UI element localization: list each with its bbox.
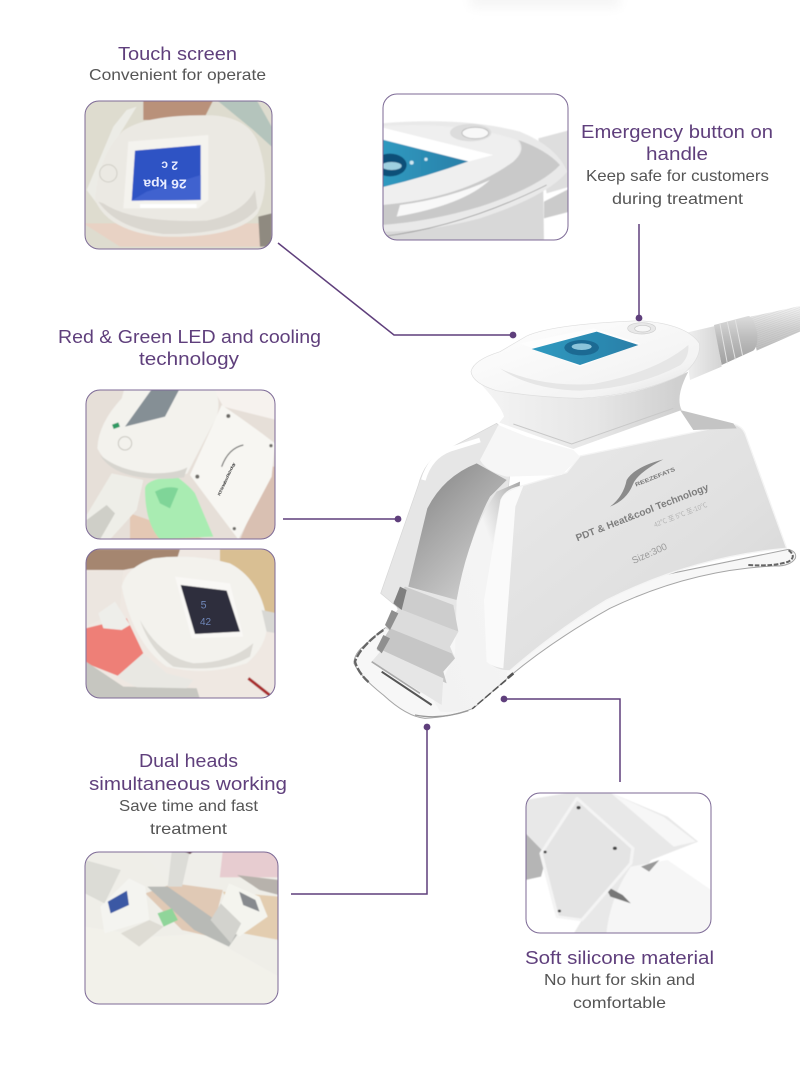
plate print: technology: PDT & Heat&cool Technology [574,482,711,544]
text block: emergency button: Emergency button on [581,122,773,142]
photo: dual heads [85,851,280,1006]
text block: dual heads: treatment [150,821,228,838]
photo frame: dual heads [85,852,278,1004]
connector: touch screen [278,243,516,338]
photo frame: emergency button [383,94,568,240]
device body shapes [354,306,800,718]
ribbed collar [714,316,757,365]
photo frame: green LED [86,390,275,539]
plate print: PDT & Heat&cool Technology [216,461,236,496]
screen readout [200,601,211,625]
text block: dual heads: simultaneous working [89,774,287,794]
text block: emergency button [581,122,773,208]
hose [751,306,800,351]
connector: silicone [501,696,620,782]
top rail [680,410,737,430]
text block: touch screen: Convenient for operate [89,67,266,84]
gel window [408,463,507,600]
text block: emergency button: Keep safe for customers [586,168,769,185]
white collar [683,326,722,380]
connector: LED [283,516,401,522]
stepped silicone ridges [393,587,458,632]
front plate [484,424,787,671]
photo: touch screen close-up [83,100,273,250]
handle top [471,321,700,398]
photo: emergency button close-up [384,121,568,240]
plate bevel highlight [484,486,523,668]
text block: touch screen [89,44,266,84]
text block: LED: Red & Green LED and cooling [58,327,321,347]
text block: touch screen: Touch screen [118,44,237,64]
emergency button [628,323,656,334]
connector: dual heads [291,724,430,894]
photo: green LED [86,387,277,540]
text block: dual heads: Save time and fast [119,798,259,815]
silicone lip [354,549,796,718]
rear plate [381,423,513,633]
text block: dual heads: Dual heads [139,751,238,771]
screen readout: 26 kpa [142,176,187,190]
plate print: size: Size:300 [630,542,669,567]
screen readout: 5 [201,599,207,611]
screen readout: 2 c [161,159,178,173]
photo: silicone edge [526,793,711,934]
lip dark beading [748,550,793,565]
display screen [532,332,638,365]
text block: silicone: No hurt for skin and [544,972,695,989]
text block: emergency button: handle [646,144,708,164]
photo frame: touch screen [85,101,272,249]
neck [480,425,580,477]
text block: silicone [525,948,714,1012]
handle skirt [482,372,688,449]
clear sweep [433,482,520,712]
connector: emergency button [636,224,642,321]
plate print: temperature: 42℃ 至 5℃ 至-10℃ [653,501,708,529]
text block: silicone: comfortable [573,995,666,1012]
logo swoosh [610,459,663,507]
faint top shadow [470,0,620,8]
plate print: brand: REEZEFATS [634,467,677,489]
photo: red LED [86,549,277,699]
text block: silicone: Soft silicone material [525,948,714,968]
text block: LED: technology [139,349,239,369]
screen readout: 42 [200,617,212,628]
screen readout [143,162,186,189]
text block: emergency button: during treatment [612,191,744,208]
text block: dual heads [89,751,287,838]
text block: LED [58,327,321,369]
main device: cryo handle [354,306,800,718]
photo frame: silicone edge [526,793,711,933]
photo frame: red LED [86,549,275,698]
